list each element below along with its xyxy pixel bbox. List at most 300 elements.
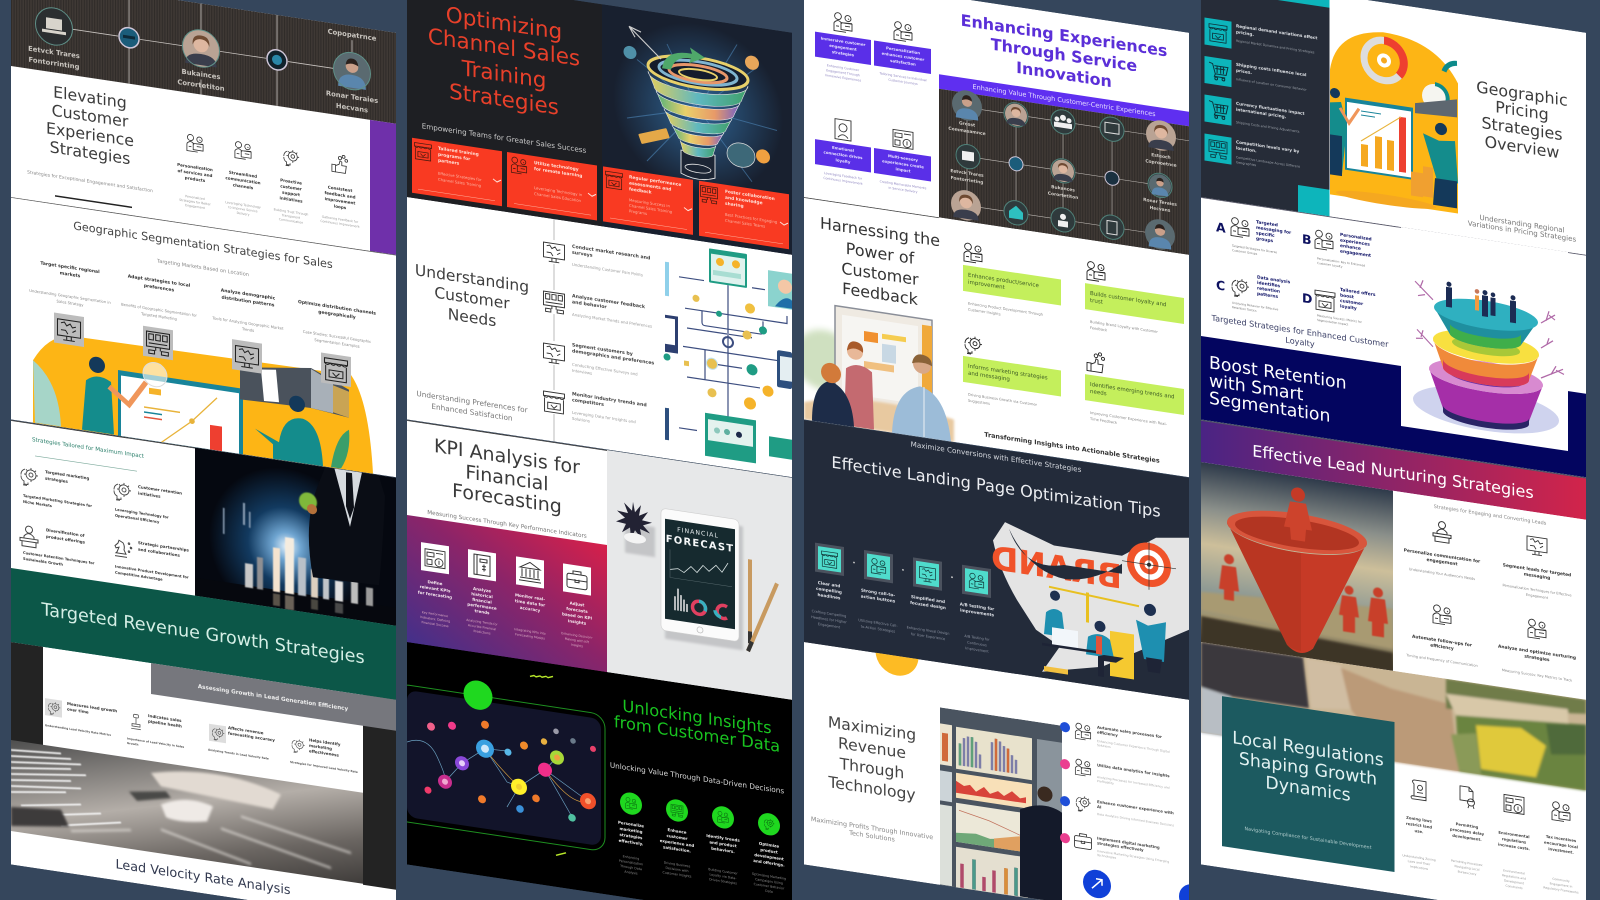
title: Innovation xyxy=(1016,58,1112,91)
title: with Smart xyxy=(1209,371,1304,405)
feature tiles: impact xyxy=(896,166,911,173)
title: Forecasting xyxy=(452,479,562,518)
purple side bar xyxy=(370,120,396,255)
title: Harnessing the xyxy=(820,213,940,250)
gradient KPI panel: trends xyxy=(474,608,490,615)
feature labels: communication xyxy=(225,175,261,185)
tip cards: Simplified and xyxy=(911,594,945,604)
benefit items: Identifies emerging trends and xyxy=(1090,382,1175,401)
desk photo: FINANCIAL xyxy=(677,527,719,540)
kicker rule xyxy=(35,456,137,472)
feature sublabels: Continuous Improvement xyxy=(320,219,360,229)
A-D strategy grid: Tailored offers xyxy=(1340,287,1376,298)
dark list panel: Geographies xyxy=(1236,160,1257,167)
title: Through Service xyxy=(991,35,1137,75)
slide: KPI Analysis for Financial Forecasting xyxy=(407,420,792,700)
regulations row: Engagement in xyxy=(1550,881,1572,889)
title: Understanding xyxy=(415,261,529,296)
dark list panel: pricing. xyxy=(1236,29,1254,37)
network diagram band: Bukainces xyxy=(182,68,220,81)
A-D strategy grid: customer xyxy=(1340,298,1364,307)
insights row: Optimizing Marketing xyxy=(752,872,786,881)
columns of strategies: Segmentation Examples xyxy=(314,338,360,349)
tip cards: action buttons xyxy=(861,594,896,604)
feature labels: improvement xyxy=(325,196,355,206)
red cards: Leveraging Technology in xyxy=(534,185,583,197)
tip cards: headlines xyxy=(818,592,841,601)
A-D strategy grid: Measuring Success: Metrics for xyxy=(1317,313,1363,324)
A-D strategy grid: Segmentation Impact xyxy=(1317,318,1349,327)
regulations row: Permitting Processes: xyxy=(1451,859,1483,867)
A-D strategy grid: D xyxy=(1302,290,1312,307)
regulations row: processes delay xyxy=(1450,826,1485,837)
subtitle: Navigating Compliance for Sustainable Development xyxy=(1245,826,1372,851)
metric items: marketing xyxy=(309,743,332,751)
red cards: for remote learning xyxy=(534,166,582,179)
feature tiles: Personalization xyxy=(886,45,920,55)
red cards: Best Practices for Engaging xyxy=(725,212,778,225)
benefit items xyxy=(963,242,1184,435)
metric items: Affects revenue xyxy=(228,725,264,735)
kicker: Strategies Tailored for Maximum Impact xyxy=(32,437,145,460)
strategy grid: Targeted Marketing Strategies for xyxy=(23,494,92,508)
columns of strategies: Case Studies: Successful Geographic xyxy=(303,330,371,344)
step list: demographics and preferences xyxy=(572,348,654,367)
columns of strategies: Targeted Marketing xyxy=(140,312,177,321)
gradient KPI panel: financial xyxy=(472,597,492,605)
tip cards xyxy=(811,542,995,655)
gradient KPI panel: insights xyxy=(568,618,587,626)
dark list panel: Influence of Location on Consumer Behavior xyxy=(1236,77,1307,92)
insights row: Loyalty via Data- xyxy=(709,872,737,880)
orange illustration xyxy=(33,326,373,475)
strategy grid: Targeted marketing xyxy=(45,469,89,481)
title: Through xyxy=(839,754,904,783)
feature labels: Streamlined xyxy=(229,170,257,179)
feature labels: of services and xyxy=(178,168,213,178)
tip cards: Engagement xyxy=(818,622,841,630)
A-D strategy grid: experiences xyxy=(1340,237,1370,248)
feature tiles: Emotional xyxy=(832,145,855,153)
tips panel: Strategies for Engaging and Converting Leads xyxy=(1434,504,1547,527)
dark list panel: Shipping Costs and Pricing Adjustments xyxy=(1236,120,1300,134)
tip cards: Crafting Compelling xyxy=(812,609,846,618)
insights row: Customer Insights xyxy=(663,870,692,879)
red cards: Measuring Success in xyxy=(629,197,670,209)
slide: Enhancing Experiences Through Service Innovation xyxy=(804,0,1189,255)
regulations row: Tax incentives xyxy=(1546,834,1577,843)
regulations row: investment. xyxy=(1548,846,1574,855)
column 2 of slides xyxy=(395,0,792,900)
A-D strategy grid: patterns xyxy=(1257,291,1279,300)
slide: Harnessing the Power of Customer Feedback xyxy=(794,196,1189,477)
tips panel xyxy=(1393,491,1586,701)
network panel: Corortetiton xyxy=(1048,191,1078,201)
tips panel: engagement xyxy=(1426,557,1458,567)
strategy grid: Leveraging Technology for xyxy=(115,508,169,520)
title: Effective Lead Nurturing Strategies xyxy=(1252,441,1534,502)
photo: handshake over map xyxy=(1201,642,1586,791)
title: Customer xyxy=(52,101,129,131)
metric items: Analyzing Trends in Lead Velocity Rate xyxy=(208,748,269,761)
regulations row: Bureaucracy xyxy=(1458,870,1477,876)
red cards: sharing xyxy=(725,201,744,209)
insights row: strategies xyxy=(620,832,643,840)
regulations row: use. xyxy=(1415,828,1424,834)
regulations row: Laws and Their xyxy=(1408,859,1431,867)
tips panel: Timing and Frequency of Communication xyxy=(1405,653,1478,668)
network panel: Eetvck Trares xyxy=(950,168,984,179)
feature tiles: connection drives xyxy=(824,149,863,160)
network panel: Bukances xyxy=(1051,184,1075,194)
red cards: programs for xyxy=(438,152,471,163)
photo: blurred traffic xyxy=(11,740,363,884)
gradient KPI panel: based on KPI xyxy=(562,611,592,621)
tips panel: Personalize communication for xyxy=(1404,547,1481,565)
strategy grid: and collaborations xyxy=(138,547,180,558)
round arrow button xyxy=(1083,868,1111,900)
step list: Segment customers by xyxy=(572,342,633,357)
feature labels: Proactive xyxy=(280,177,302,186)
brand illustration xyxy=(991,508,1189,694)
slide: Effective Lead Nurturing Strategies xyxy=(1201,420,1586,701)
feature sublabels: Transparent xyxy=(281,213,301,220)
A-D strategy grid: Personalization: Key to Enhanced xyxy=(1317,256,1365,268)
dark list panel xyxy=(1201,0,1330,217)
tip cards: to-Action Strategies xyxy=(861,625,895,634)
regulations row: Implications xyxy=(1410,864,1428,871)
title: Power of xyxy=(846,239,915,268)
regulations row: increase costs. xyxy=(1498,842,1531,851)
title: from Customer Data xyxy=(614,712,780,756)
benefit items: Building Brand Loyalty with Customer xyxy=(1090,320,1158,334)
title: KPI Analysis for xyxy=(434,434,580,479)
A-D strategy grid: B xyxy=(1302,231,1312,248)
subtitle: Measuring Success Through Key Performance Indicators xyxy=(427,510,587,540)
orange illustration xyxy=(1330,24,1458,216)
title: Enhancing Experiences xyxy=(961,11,1167,60)
gradient KPI panel: time data for xyxy=(515,598,546,608)
tip cards: A/B Testing for xyxy=(964,634,990,642)
illustration panel xyxy=(1401,227,1568,451)
strategy grid: Niche Markets xyxy=(23,500,52,508)
insights row: and offerings. xyxy=(753,858,785,868)
action list: Enhancing Customer Experience Through Digital xyxy=(1097,739,1170,754)
green node xyxy=(464,678,492,712)
feature tiles: satisfaction xyxy=(890,58,916,67)
grey banner xyxy=(151,663,396,731)
insights row: Through Data xyxy=(619,864,642,871)
action list: Utilize data analytics for insights xyxy=(1097,762,1170,778)
brand illustration: BRAND xyxy=(991,538,1122,597)
action list: Analyzing Processes for Increased Efficiency and xyxy=(1097,775,1170,790)
tips panel: Segment leads for targeted xyxy=(1503,562,1571,579)
metric items: pipeline health xyxy=(148,719,182,729)
network diagram band: Hecvans xyxy=(336,102,368,115)
benefit items: Enhancing Product Development Through xyxy=(968,302,1043,317)
subtitle: Loyalty xyxy=(1285,335,1315,349)
columns of strategies: Target specific regional xyxy=(40,260,100,275)
title: Segmentation xyxy=(1209,389,1330,427)
A-D strategy grid: groups xyxy=(1256,236,1274,244)
red cards: Channel Sales Training xyxy=(629,203,673,214)
red cards: Utilize technology xyxy=(534,160,579,173)
title: Experience xyxy=(46,118,134,150)
title: Targeted Revenue Growth Strategies xyxy=(40,600,365,669)
strategy grid xyxy=(20,465,189,586)
title: Dynamics xyxy=(1265,773,1351,806)
regulations row: Regulatory Frameworks xyxy=(1543,885,1579,895)
title: Optimizing xyxy=(446,3,562,45)
network diagram band: Fontorrinting xyxy=(29,56,80,71)
benefit items: and messaging xyxy=(968,371,1010,383)
title: Geographic Segmentation Strategies for Sales xyxy=(73,219,333,271)
feature tiles: Engagement Through xyxy=(826,68,860,77)
regulations row: Community xyxy=(1552,877,1570,883)
subtitle: Tech Solutions xyxy=(848,829,895,844)
feature tiles: Tailoring Services to Individual xyxy=(878,71,927,82)
insights row: behaviors. xyxy=(711,846,735,854)
dark list panel: international pricing. xyxy=(1236,107,1287,119)
action list: Implement digital marketing xyxy=(1097,835,1160,850)
gradient KPI panel: Analyze xyxy=(473,586,491,594)
step list: Solutions xyxy=(572,416,590,423)
title: Strategies xyxy=(449,79,559,121)
subtitle: Enhanced Satisfaction xyxy=(431,402,513,423)
gradient KPI panel: Key Performance xyxy=(422,610,448,618)
feature sublabels xyxy=(179,194,360,228)
purple banner xyxy=(939,74,1189,126)
feature labels: products xyxy=(185,175,206,183)
title: Boost Retention xyxy=(1209,353,1347,394)
insights row: satisfaction. xyxy=(663,844,691,854)
step list: Interviews xyxy=(572,368,592,376)
insights row: development xyxy=(754,852,784,862)
kicker: Maximize Conversions with Effective Strategies xyxy=(911,440,1082,474)
A-D strategy grid: Analyzing Behavior for Effective xyxy=(1232,301,1278,312)
metric items: Growth xyxy=(127,741,138,747)
A-D strategy grid: Data analysis xyxy=(1257,274,1291,285)
benefit items: Improving Customer Experience with Real- xyxy=(1090,411,1167,427)
title: Local Regulations xyxy=(1232,728,1384,771)
takeaway: Transforming Insights into Actionable Strategies xyxy=(984,431,1160,465)
regulations row: Understanding Zoning xyxy=(1402,853,1436,862)
network panel: Commasamnce xyxy=(948,126,986,137)
insights row: Optimize xyxy=(759,841,779,849)
network diagram band: Eetvck Trares xyxy=(28,45,80,60)
dark list panel: Currency fluctuations impact xyxy=(1236,101,1305,116)
step list: Conducting Effective Surveys and xyxy=(572,362,638,377)
feature labels: customer xyxy=(280,183,303,192)
tips panel: messaging xyxy=(1524,571,1550,581)
feature sublabels: Communication xyxy=(279,217,303,225)
insights row: Enhancing xyxy=(623,854,639,861)
feature sublabels: Personalized xyxy=(185,194,205,201)
slide: Targeted Revenue Growth Strategies xyxy=(11,415,396,700)
subtitle: Understanding Preferences for xyxy=(416,389,529,415)
title: Strategies xyxy=(50,137,130,168)
feature sublabels: Delivery xyxy=(237,211,250,217)
benefit items: Builds customer loyalty and xyxy=(1090,291,1166,308)
step list: Understanding Customer Pain Points xyxy=(572,262,643,277)
title: Unlocking Insights xyxy=(622,696,772,738)
A-D strategy grid: loyalty xyxy=(1340,303,1357,312)
feature tiles: Leveraging Feedback for xyxy=(824,171,863,181)
slide: Optimizing Channel Sales Training Strategies xyxy=(407,0,792,255)
slide: Geographic Segmentation Strategies for Sales xyxy=(11,197,396,479)
subtitle: Targeted Strategies for Enhanced Customer xyxy=(1211,312,1389,349)
columns of strategies: geographically xyxy=(318,309,356,321)
step list: Monitor industry trends and xyxy=(572,391,647,408)
feature tiles: in Service Delivery xyxy=(888,186,918,194)
regulations row: Constraints xyxy=(1505,884,1523,890)
insights row: Personalization xyxy=(619,859,643,866)
feature labels: support xyxy=(282,190,300,197)
A-D strategy grid: engagement xyxy=(1340,248,1371,259)
gradient KPI panel: Indicators: Defining xyxy=(420,615,450,623)
subtitle: Variations in Pricing Strategies xyxy=(1468,219,1576,244)
columns of strategies: Benefits of Geographic Segmentation for xyxy=(121,303,197,318)
action list: Enhance customer experience with xyxy=(1097,799,1174,815)
action list: Solutions xyxy=(1097,743,1111,749)
squiggles xyxy=(530,673,566,857)
benefit items: Enhances product/service xyxy=(968,273,1039,289)
gradient KPI panel: Making with KPI xyxy=(565,637,589,644)
network diagram band: Corortetiton xyxy=(177,78,225,93)
columns of strategies: markets xyxy=(60,270,81,279)
red cards: Programs xyxy=(629,208,647,216)
network panel xyxy=(395,683,605,852)
slide: Lead Velocity Rate Analysis xyxy=(11,642,396,900)
feature sublabels: Gathering Feedback for xyxy=(322,215,359,224)
columns of strategies: Optimize distribution channels xyxy=(298,299,376,317)
red cards: Channel Sales Education xyxy=(534,191,582,203)
insights row: Driven Strategies xyxy=(709,877,737,886)
regulations row: Development xyxy=(1504,878,1525,886)
insights row: Customer Behavior xyxy=(754,882,785,891)
feature tiles: Immersive customer xyxy=(821,36,865,47)
action list: Innovative Marketing Strategies Using Emerging xyxy=(1097,849,1169,864)
red cards xyxy=(412,138,789,249)
A-D strategy grid: Customer Loyalty xyxy=(1317,261,1343,269)
banner text: Enhancing Value Through Customer-Centric Experiences xyxy=(973,83,1156,118)
columns of strategies: preferences xyxy=(144,283,174,294)
tip cards: Strong call-to- xyxy=(861,588,895,598)
feature sublabels: Strategies for Better xyxy=(179,198,212,207)
metric items: Helps identify xyxy=(309,737,341,747)
step list: Analyzing Market Trends and Preferences xyxy=(572,312,652,329)
feature tiles: experiences create xyxy=(882,158,924,170)
dark list panel: Regional Market Dynamics and Pricing Strategies xyxy=(1236,39,1315,55)
gradient KPI panel: relevant KPIs xyxy=(420,584,451,594)
feature sublabels: to Improve Service xyxy=(228,205,258,213)
gradient KPI panel: for forecasting xyxy=(418,590,452,600)
dark list panel: Shipping costs influence local xyxy=(1236,62,1307,77)
title: Shaping Growth xyxy=(1239,749,1377,790)
tip cards: Clear and xyxy=(818,580,840,588)
feature labels: feedback and xyxy=(324,190,356,200)
gradient KPI panel: Define xyxy=(428,579,443,586)
subtitle: Strategies for Exceptional Engagement and Satisfaction xyxy=(27,169,153,194)
benefit items: needs xyxy=(1090,389,1107,397)
timeline rule xyxy=(554,219,555,442)
columns of strategies: Tools for Analyzing Geographic Market xyxy=(212,316,284,331)
gradient KPI panel: Accurate Financial xyxy=(468,623,496,631)
feature labels: Consistent xyxy=(328,185,352,193)
network panel: Grosst xyxy=(959,120,975,129)
A-D strategy grid: Personalized xyxy=(1340,232,1372,243)
metric items xyxy=(45,698,358,780)
columns of strategies: distribution patterns xyxy=(222,295,275,309)
title: Customer xyxy=(841,259,919,289)
step list: competitors xyxy=(572,397,604,408)
benefit items: Time Feedback xyxy=(1089,417,1118,425)
benefit items: trust xyxy=(1090,298,1104,306)
action list: Data Analytics Driving Informed Business Decisions xyxy=(1097,812,1174,828)
feature tiles: Enhancing Customer xyxy=(827,63,860,72)
title: Channel Sales xyxy=(428,24,580,72)
subtitle: Targeting Markets Based on Location xyxy=(156,258,249,278)
action list: AI xyxy=(1097,804,1102,810)
insights row: Identify trends xyxy=(706,833,740,843)
action list: Technologies xyxy=(1096,853,1117,860)
action list: efficiency xyxy=(1097,729,1118,738)
columns of strategies: Analyze demographic xyxy=(221,287,276,302)
slide: Maximizing Revenue Through Technology xyxy=(804,618,1207,900)
green title band xyxy=(11,568,396,700)
title: Technology xyxy=(827,772,916,804)
teal title panel xyxy=(1222,696,1394,872)
strategy grid: Innovative Product Development for xyxy=(115,565,189,580)
metric items: Indicates sales xyxy=(148,713,182,723)
columns of strategies: Trends xyxy=(241,327,254,333)
gradient KPI panel: performance xyxy=(467,602,497,611)
icon tiles xyxy=(54,312,351,387)
feature icons xyxy=(187,132,348,175)
regulations row: regulations xyxy=(1502,836,1527,845)
network panel xyxy=(939,86,1189,255)
feature sublabels: Building Trust Through xyxy=(274,207,308,217)
tips panel: Automate follow-ups for xyxy=(1412,634,1473,649)
gradient KPI panel: Integrating KPIs into xyxy=(514,627,546,636)
red cards: Channel Sales Teams xyxy=(725,218,765,229)
A-D strategy grid: Targeted Strategies for Diverse xyxy=(1231,244,1277,254)
tip cards: focused design xyxy=(910,600,946,610)
red cards: feedback xyxy=(629,186,653,196)
tip cards: Continuous xyxy=(967,640,987,647)
action list: Profitability xyxy=(1097,779,1114,786)
gradient KPI panel: Predictions xyxy=(474,629,491,636)
A-D strategy grid xyxy=(1216,213,1376,331)
gradient KPI panel: historical xyxy=(471,591,493,599)
tips panel: efficiency xyxy=(1430,642,1454,652)
dark list panel: Regional demand variations affect xyxy=(1236,23,1317,40)
title: Feedback xyxy=(842,279,919,309)
insights row: Enhance xyxy=(667,827,687,835)
feature labels xyxy=(177,162,356,212)
feature tiles: strategies xyxy=(832,49,855,58)
column 4 of slides xyxy=(1201,0,1586,900)
network panel: Fontorrinting xyxy=(951,175,983,186)
red cards: Channel Sales Training xyxy=(438,177,482,188)
feature sublabels: Leveraging Technology xyxy=(225,200,261,209)
tip cards: Headlines for Higher xyxy=(811,615,847,625)
desk photo: FORECAST xyxy=(666,534,734,555)
feature tiles xyxy=(815,9,931,196)
benefit items: Informs marketing strategies xyxy=(968,364,1048,382)
insights row: customer xyxy=(666,833,688,841)
title: Effective Landing Page Optimization Tips xyxy=(831,453,1161,521)
